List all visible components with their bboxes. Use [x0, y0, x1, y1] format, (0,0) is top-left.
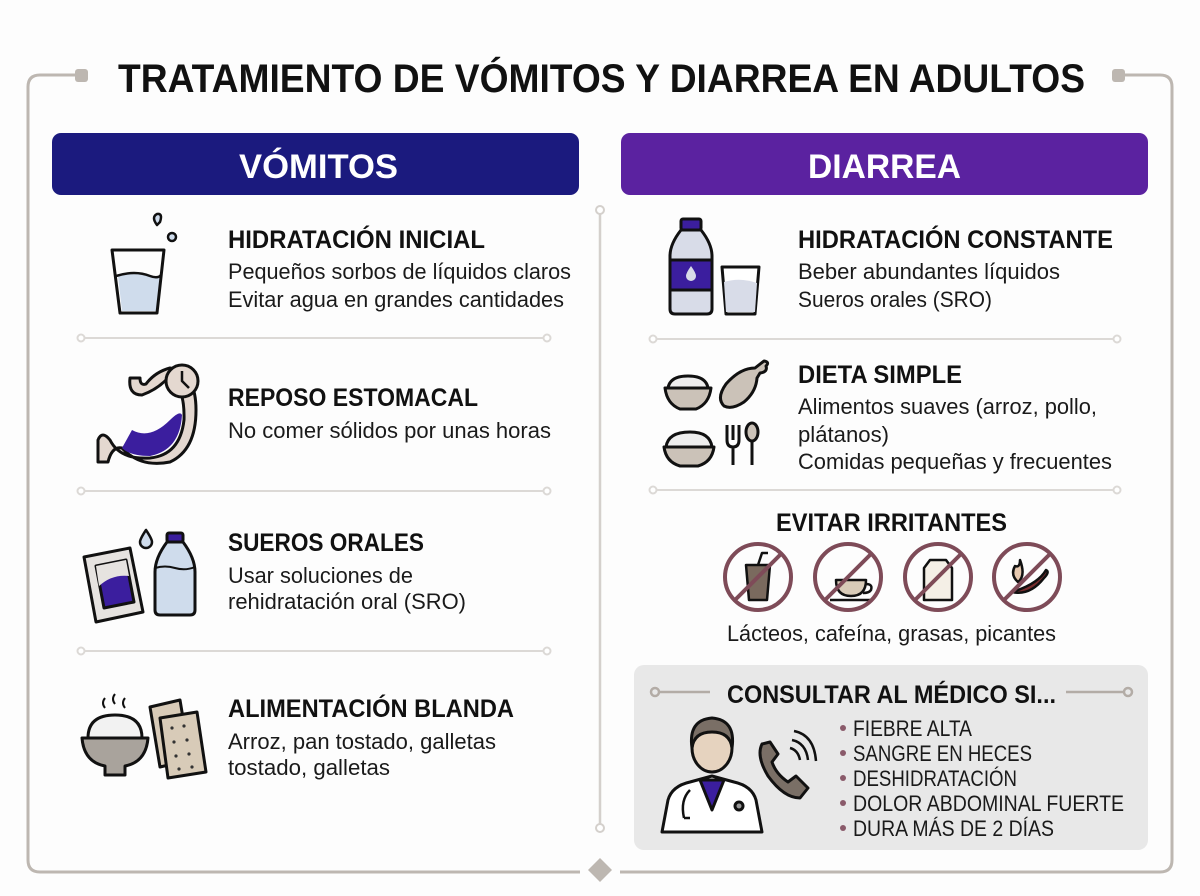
item 4 text: Arroz, pan tostado, galletas — [228, 729, 496, 754]
item 2 text — [228, 384, 551, 443]
caption: irritants: Lácteos, cafeína, grasas, picantes — [727, 621, 1056, 646]
diarrea item 2 text: DIETA SIMPLE — [798, 361, 962, 389]
list: warning signs: DURA MÁS DE 2 DÍAS — [853, 816, 1054, 841]
heading: evitar irritantes: EVITAR IRRITANTES — [776, 509, 1007, 537]
header: diarrea: DIARREA — [808, 148, 961, 186]
panel: consultar al medico — [634, 665, 1148, 850]
diarrea item 2 text: Alimentos suaves (arroz, pollo, — [798, 394, 1097, 419]
diarrea item 1 text: Sueros orales (SRO) — [798, 287, 992, 312]
list: warning signs: FIEBRE ALTA — [853, 716, 972, 741]
icon: water bottle and glass — [670, 219, 759, 314]
icon: oral rehydration sachet and bottle — [84, 530, 195, 622]
icon: phone — [760, 731, 816, 798]
diarrea item 1 text: Beber abundantes líquidos — [798, 259, 1060, 284]
item 2 text: No comer sólidos por unas horas — [228, 418, 551, 443]
list: warning signs — [840, 716, 1124, 841]
icon: rice bowl and crackers — [82, 694, 206, 778]
diarrea item 2 text: Comidas pequeñas y frecuentes — [798, 449, 1112, 474]
list: warning signs: SANGRE EN HECES — [853, 741, 1032, 766]
title: TRATAMIENTO DE VÓMITOS Y DIARREA EN ADULTOS — [118, 55, 1085, 101]
item 1 text: HIDRATACIÓN INICIAL — [228, 224, 485, 254]
icon: simple diet foods — [664, 361, 768, 466]
item 4 text: tostado, galletas — [228, 755, 390, 780]
diarrea item 2 text — [798, 361, 1112, 474]
item 1 text — [228, 224, 571, 312]
header: diarrea — [621, 133, 1148, 195]
dividers — [78, 334, 1120, 654]
header: vomitos — [52, 133, 579, 195]
item 4 text — [228, 693, 514, 780]
item 3 text: rehidratación oral (SRO) — [228, 589, 466, 614]
diarrea item 2 text: plátanos) — [798, 422, 889, 447]
item 4 text: ALIMENTACIÓN BLANDA — [228, 693, 514, 723]
list: warning signs: DOLOR ABDOMINAL FUERTE — [853, 791, 1124, 816]
item 3 text: Usar soluciones de — [228, 563, 413, 588]
diarrea item 1 text: HIDRATACIÓN CONSTANTE — [798, 224, 1113, 254]
icons: forbidden irritants — [725, 544, 1060, 610]
item 2 text: REPOSO ESTOMACAL — [228, 384, 478, 412]
icon: stomach with clock — [98, 365, 198, 463]
item 1 text: Pequeños sorbos de líquidos claros — [228, 259, 571, 284]
item 1 text: Evitar agua en grandes cantidades — [228, 287, 564, 312]
header: vomitos: VÓMITOS — [239, 148, 398, 186]
heading: consultar: CONSULTAR AL MÉDICO SI... — [727, 680, 1056, 709]
item 3 text: SUEROS ORALES — [228, 529, 424, 557]
diarrea item 1 text — [798, 224, 1113, 312]
list: warning signs: DESHIDRATACIÓN — [853, 766, 1017, 791]
icon: doctor — [662, 718, 762, 832]
icon: glass of water — [112, 214, 176, 313]
item 3 text — [228, 529, 466, 614]
